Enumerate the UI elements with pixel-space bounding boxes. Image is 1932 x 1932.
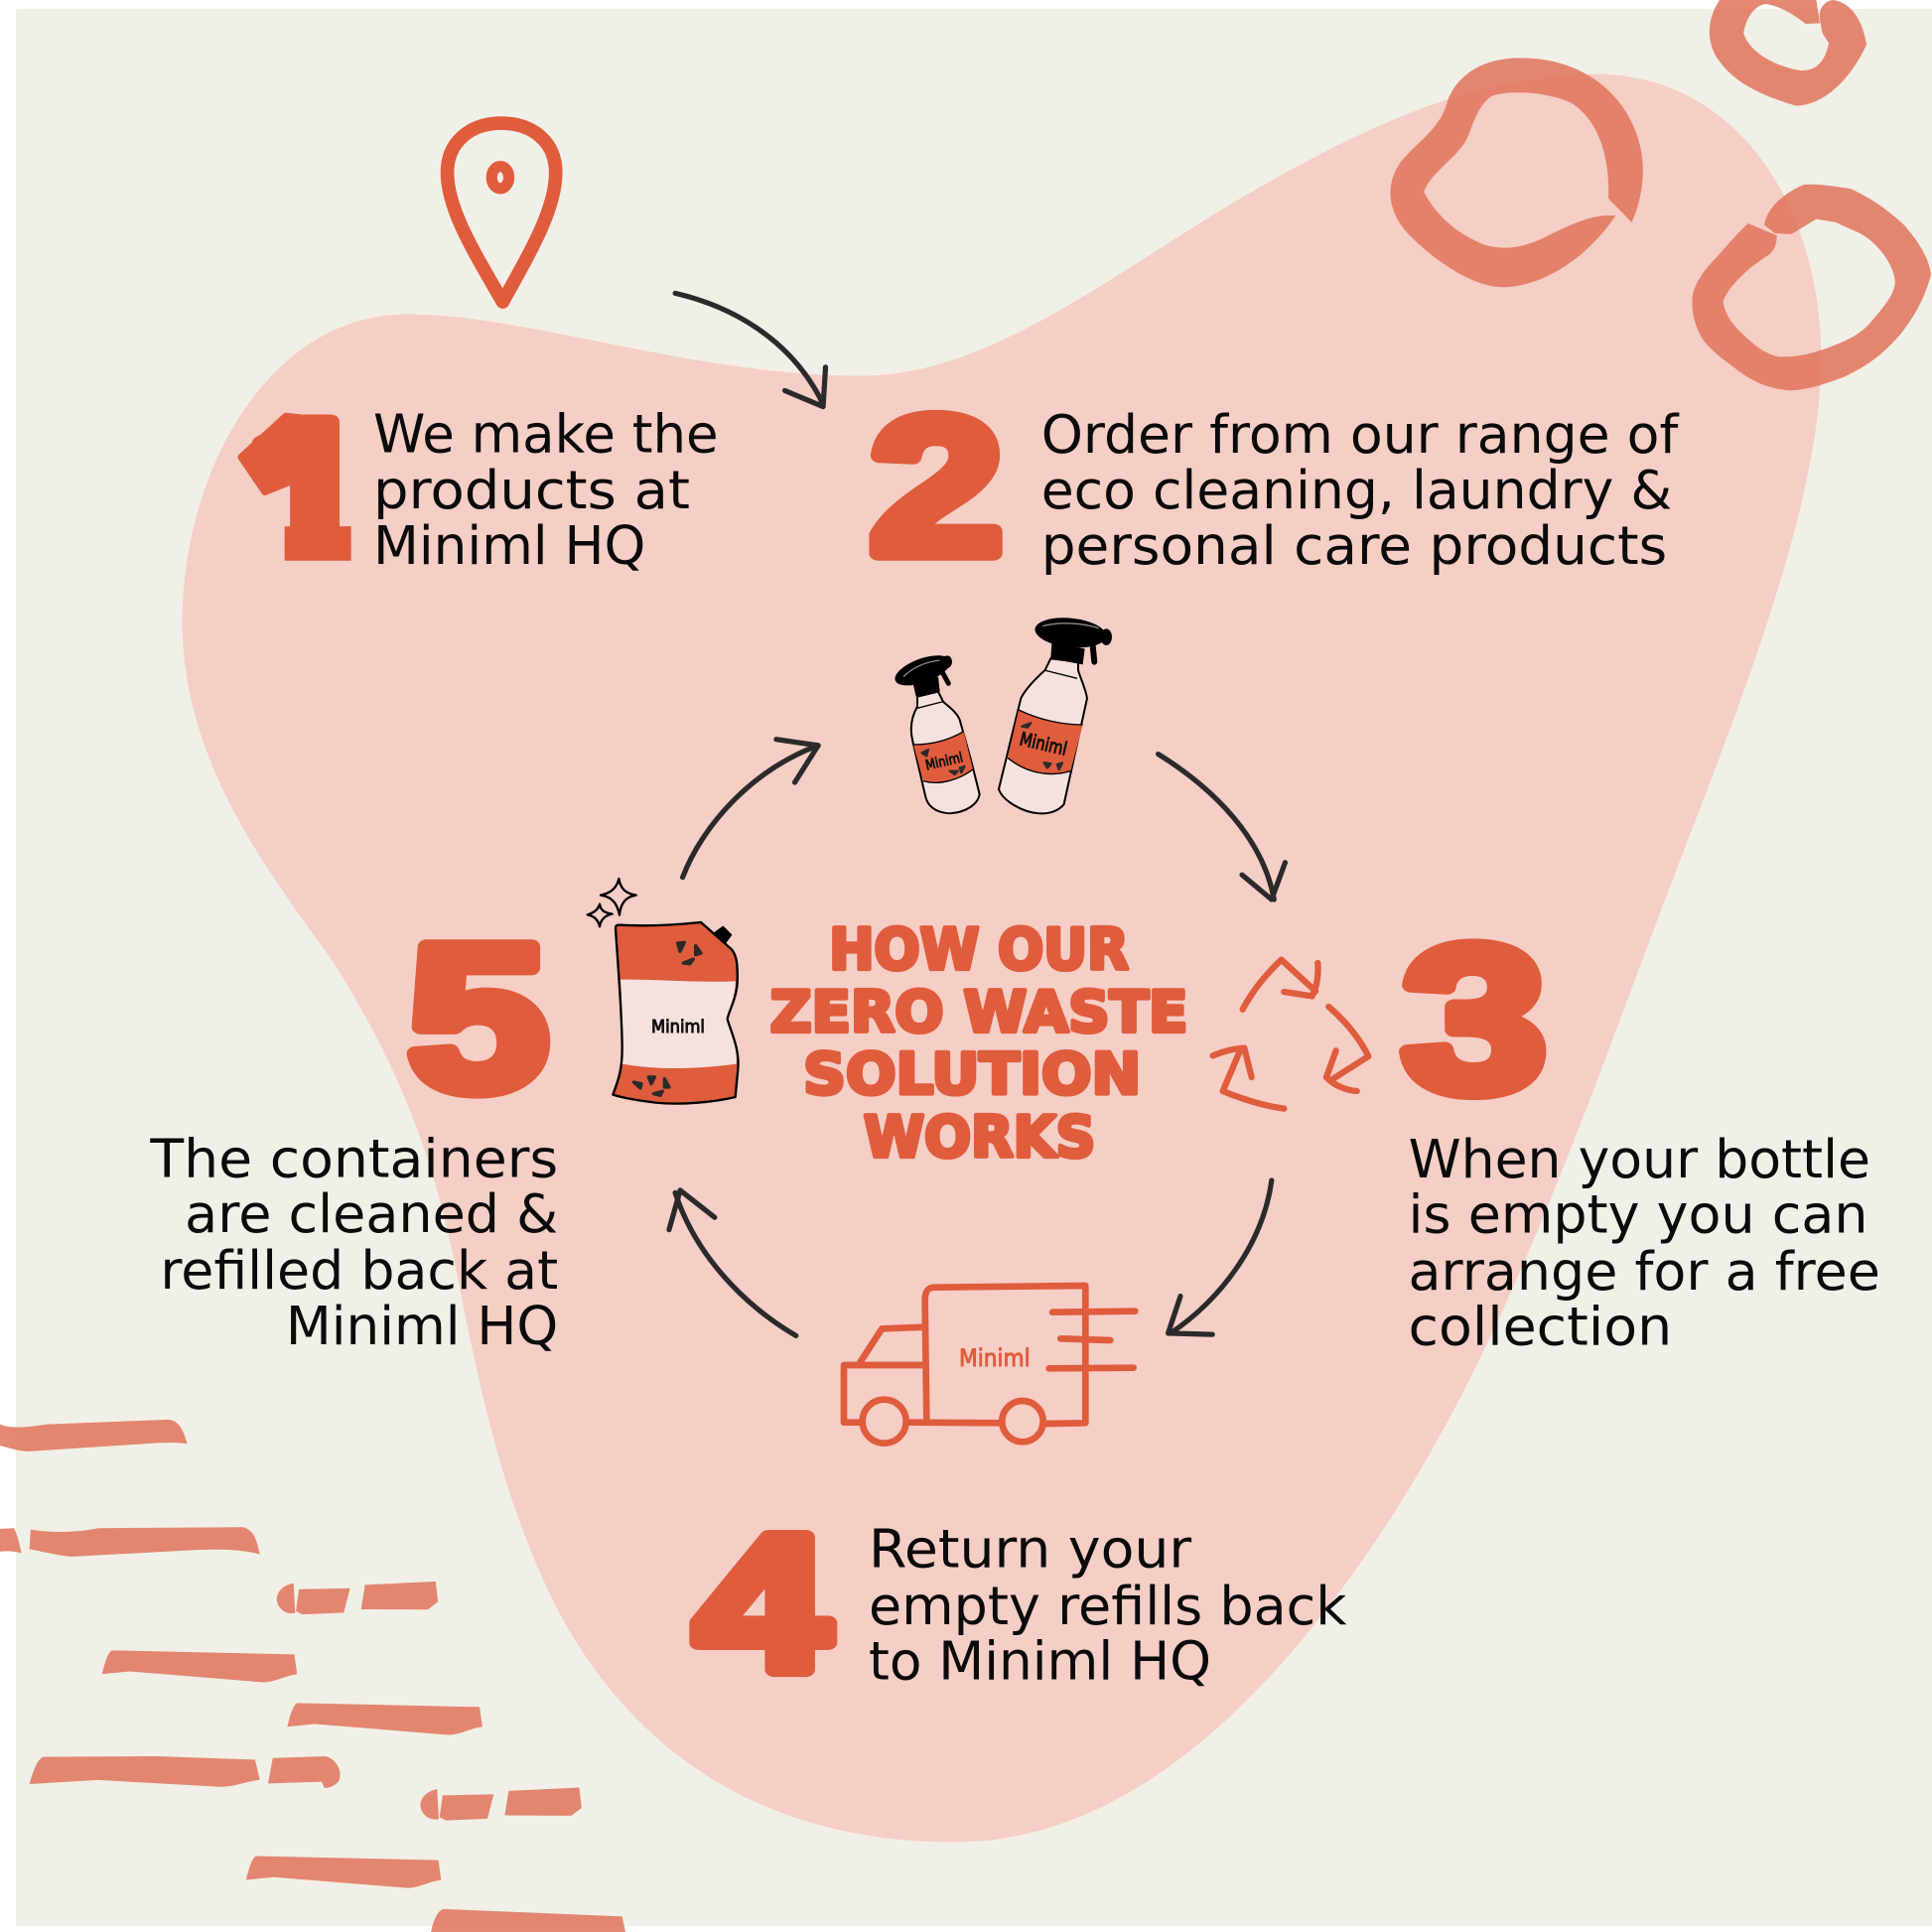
step 5 text: The containers — [149, 1127, 558, 1189]
arrow: recycle to truck — [1169, 1180, 1272, 1334]
icon: refill pouch with sparkles: Miniml — [651, 1018, 705, 1037]
title: HOW OUR — [829, 917, 1129, 983]
title: SOLUTION — [803, 1041, 1141, 1107]
arrow: truck to pouch — [669, 1190, 796, 1335]
icon: delivery truck: Miniml — [959, 1344, 1031, 1372]
step 2 text: Order from our range of — [1041, 403, 1680, 466]
icon: location pin — [448, 123, 556, 302]
brush dashes bottom left — [0, 1420, 625, 1932]
step 3 text — [1409, 1128, 1880, 1358]
brush circles top right — [1390, 0, 1931, 390]
step 2 text: eco cleaning, laundry & — [1041, 459, 1672, 521]
icon: delivery truck — [844, 1286, 1135, 1444]
step 3 text: When your bottle — [1409, 1128, 1870, 1190]
icon: recycle arrows — [1213, 960, 1368, 1109]
arrow: step 1 to step 2 — [675, 293, 826, 407]
step 1 — [238, 412, 716, 571]
step 5 — [149, 902, 558, 1357]
pink blob background — [183, 73, 1821, 1842]
icon: two spray bottles: Miniml — [924, 750, 965, 774]
icon: two spray bottles — [892, 615, 1112, 813]
step 2 — [870, 376, 1680, 595]
step 1 number — [238, 413, 351, 561]
icon: refill pouch with sparkles — [588, 879, 739, 1104]
icon: two spray bottles: Miniml — [1018, 729, 1069, 760]
step 3 text: is empty you can — [1409, 1183, 1868, 1246]
step 5 text: are cleaned & — [185, 1182, 558, 1245]
step 1 text — [373, 402, 719, 577]
step 4 text: Return your — [869, 1518, 1191, 1581]
step 4 number: 4 — [695, 1497, 829, 1712]
step 5 text — [149, 1127, 558, 1357]
step 1 number: 1 — [245, 380, 373, 594]
step 1 text: products at — [373, 459, 690, 521]
step 3 text: arrange for a free — [1409, 1240, 1880, 1303]
step 5 text: Miniml HQ — [286, 1295, 558, 1357]
step 3 number: 3 — [1402, 903, 1547, 1135]
step 4 text: empty refills back — [869, 1575, 1347, 1637]
step 4 — [695, 1497, 1347, 1712]
step 2 text: personal care products — [1041, 514, 1667, 577]
step 4 text — [869, 1518, 1347, 1693]
step 1 text: We make the — [373, 402, 719, 465]
arrow: pouch to bottles — [683, 740, 818, 878]
arrow: bottles to recycle — [1159, 755, 1285, 899]
step 2 text — [1041, 403, 1680, 577]
step 5 number: 5 — [408, 902, 548, 1134]
step 4 text: to Miniml HQ — [869, 1630, 1211, 1693]
title: WORKS — [864, 1105, 1095, 1171]
title: ZERO WASTE — [770, 980, 1187, 1045]
title — [770, 917, 1187, 1171]
step 3 text: collection — [1409, 1296, 1672, 1358]
step 1 text: Miniml HQ — [373, 514, 645, 577]
step 3 — [1402, 903, 1880, 1358]
step 5 text: refilled back at — [160, 1239, 558, 1302]
step 2 number: 2 — [870, 376, 1003, 595]
